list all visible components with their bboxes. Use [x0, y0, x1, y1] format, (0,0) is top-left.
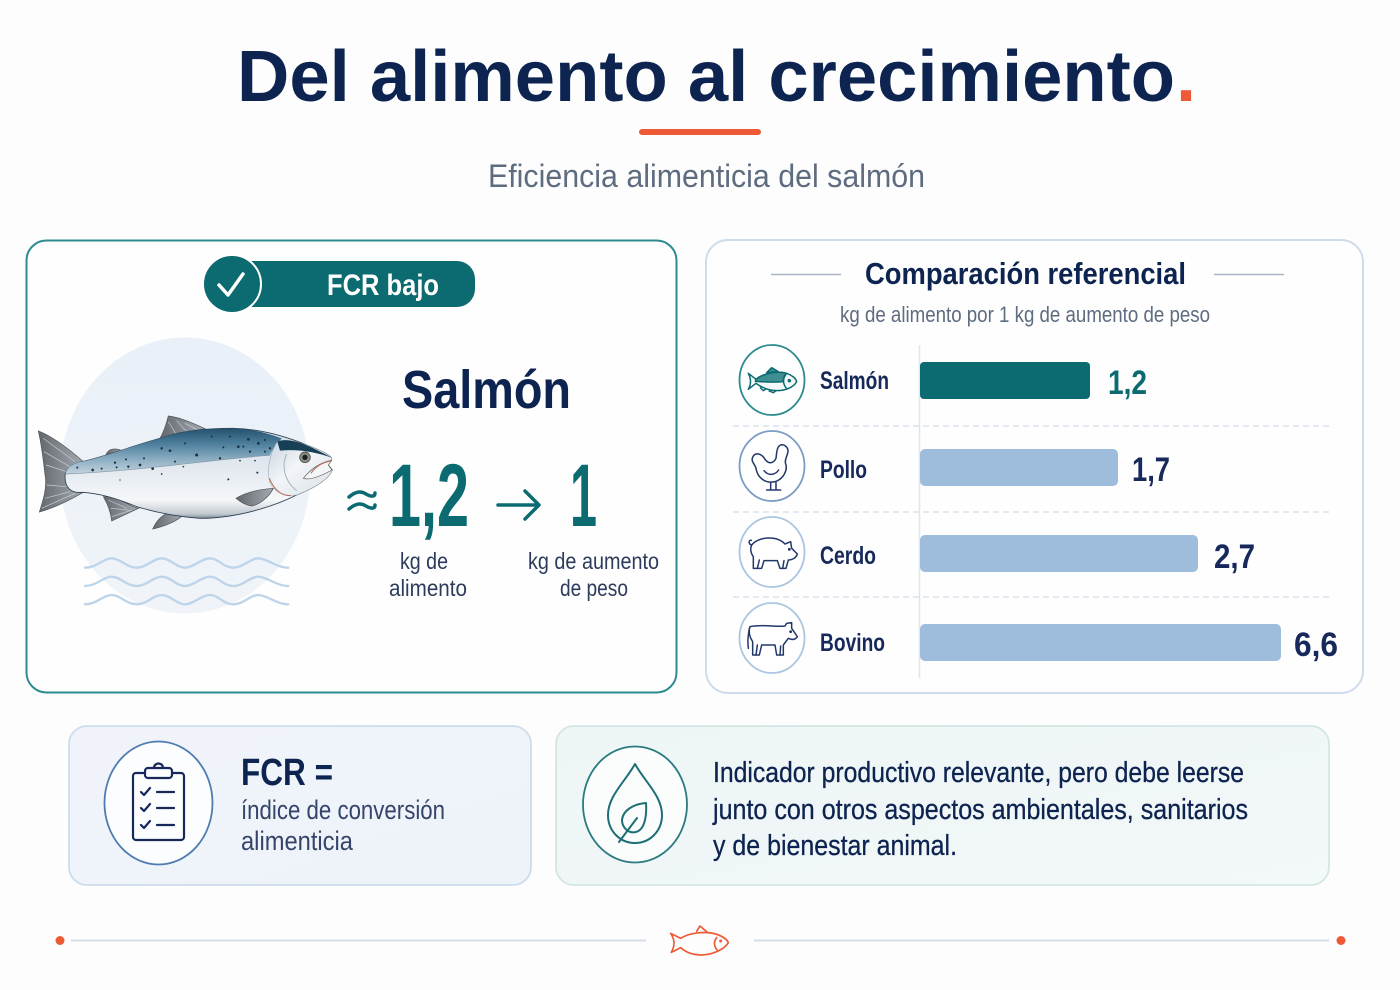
panel: salmon FCR [26, 240, 676, 692]
row: Salmón: Salmón [820, 367, 889, 395]
approx symbol [349, 492, 375, 509]
label: kg de aumento de peso: de peso [560, 575, 628, 601]
icon: water drop with leaf [583, 746, 687, 862]
note text: Indicador productivo relevante, pero debe leerse [713, 757, 1244, 789]
label: kg de aumento de peso [528, 548, 659, 601]
back colouring [66, 428, 282, 474]
title underline [639, 129, 761, 135]
title: Del alimento al crecimiento [237, 37, 1175, 117]
heading: Salmón: Salmón [402, 360, 571, 420]
FCR definition text: alimenticia [241, 826, 354, 856]
row: Cerdo: Cerdo [820, 542, 876, 570]
icon: chicken [752, 445, 788, 490]
row: Bovino: 6,6 [1294, 626, 1338, 664]
panel: note [556, 726, 1329, 885]
note text: junto con otros aspectos ambientales, sanitarios [712, 794, 1248, 826]
row: Salmón: 1,2 [1108, 364, 1147, 402]
illustration: salmon in circle [38, 338, 332, 614]
row: Pollo: 1,7 [1132, 451, 1170, 489]
note text [712, 757, 1248, 862]
icon: pig [749, 538, 797, 568]
fish body [65, 428, 332, 518]
label: kg de alimento: kg de [400, 548, 448, 574]
fish spots [76, 436, 271, 481]
label: kg de alimento: alimento [389, 575, 467, 601]
badge: FCR bajo: FCR bajo [327, 269, 439, 302]
comparison subtitle: kg de alimento por 1 kg de aumento de peso [840, 302, 1210, 327]
row: Pollo: Pollo [820, 456, 867, 484]
title: . [1176, 37, 1196, 117]
head [268, 441, 332, 495]
icon: footer fish [671, 926, 728, 955]
label: kg de alimento [389, 548, 467, 601]
fins [38, 416, 205, 529]
icon: cow [748, 623, 797, 655]
arrow [498, 491, 539, 519]
footer line [56, 926, 1346, 955]
subtitle: Eficiencia alimenticia del salmón [488, 158, 925, 194]
row: Salmón [740, 345, 1147, 415]
FCR heading: FCR = [241, 752, 333, 794]
FCR definition text: índice de conversión [241, 795, 445, 825]
FCR definition text [241, 795, 445, 856]
badge: FCR bajo [203, 255, 475, 313]
row: Pollo [740, 431, 1170, 501]
row: Cerdo: 2,7 [1214, 538, 1255, 576]
row: Bovino [740, 603, 1338, 673]
value: 1,2: 1,2 [389, 445, 469, 545]
row: Bovino: Bovino [820, 629, 885, 657]
comparison heading: Comparación referencial [865, 256, 1186, 291]
panel: comparison [706, 240, 1363, 693]
row: Cerdo [740, 517, 1255, 587]
label: kg de aumento de peso: kg de aumento [528, 548, 659, 574]
value: 1: 1 [570, 445, 597, 545]
icon: fish [748, 368, 797, 393]
icon: clipboard [104, 742, 212, 864]
note text: y de bienestar animal. [713, 830, 957, 862]
panel: FCR definition [69, 726, 531, 885]
